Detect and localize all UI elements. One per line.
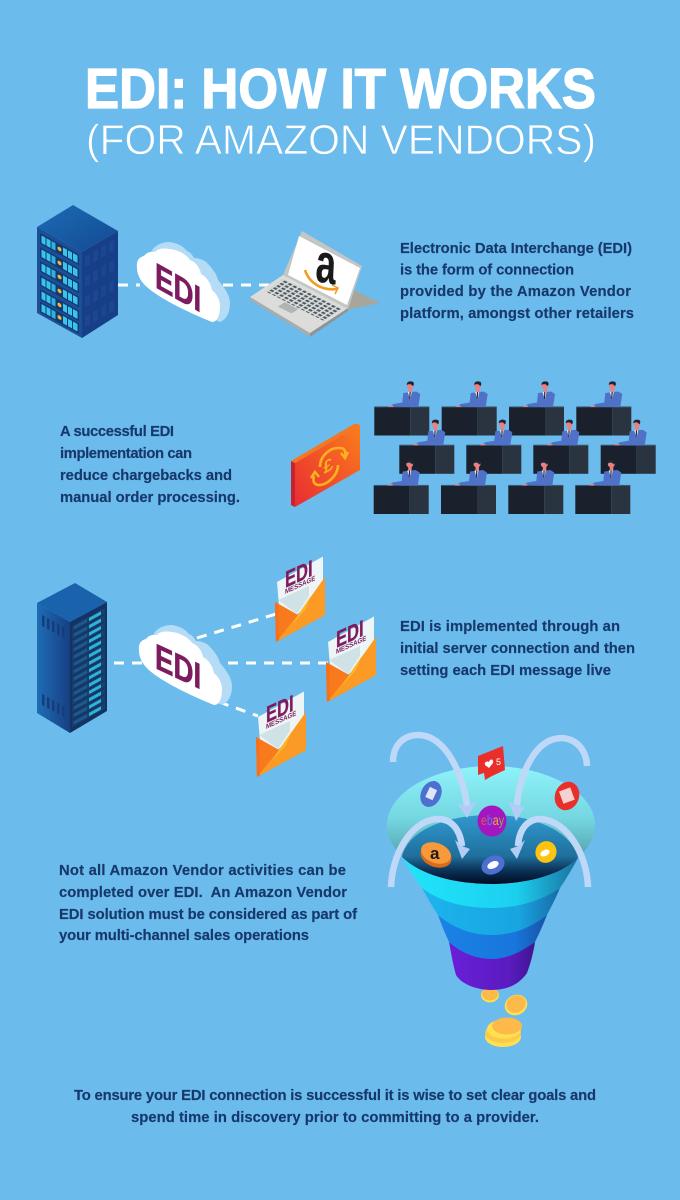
text: closing advice: To ensure your EDI connection is successful it is wise to set clear goals and [74,1088,596,1104]
icon: like notification badge [478,746,505,780]
icon: eBay badge [478,806,506,836]
text: multi-channel note: Not all Amazon Vendor activities can be [59,863,346,879]
text: EDI definition: is the form of connection [400,262,574,278]
icon: newspaper badge blue [416,778,446,810]
icon: EDI cloud: EDI [155,255,201,321]
illustration: sales funnel [387,735,595,1047]
icon: EDI message envelope bottom: MESSAGE [266,710,296,731]
icon: laptop with Amazon logo: a [314,231,338,298]
illustration: office workers at desks [374,381,656,514]
icon: EDI message envelope top: MESSAGE [285,575,315,596]
text: multi-channel note: EDI solution must be considered as part of [59,907,357,923]
funnel interior [402,815,578,884]
icon: Amazon badge: a [430,844,440,863]
panel: EDI connection diagram [37,205,380,338]
text: EDI definition: Electronic Data Interchange (EDI) [400,241,632,257]
text: multi-channel note: your multi-channel sales operations [59,928,309,944]
icon: EDI message envelope bottom [256,690,306,777]
icon: EDI message envelope top [275,555,325,642]
text: multi-channel note [59,863,357,944]
arrow: lower left into funnel [391,819,470,887]
arrow: lower right into funnel [510,819,588,887]
icon: laptop with Amazon logo [250,231,380,337]
text: implementation steps: initial server connection and then [400,641,635,657]
icon: store badge red [551,778,583,814]
connection dashes [118,284,272,286]
subtitle: (FOR AMAZON VENDORS) [86,116,596,163]
icon: EDI cloud [137,242,230,322]
text: successful implementation [60,424,240,506]
text: implementation steps: setting each EDI message live [400,663,611,679]
arrow: top left into funnel [393,735,477,818]
text: successful implementation: A successful EDI [60,424,174,440]
text: successful implementation: reduce chargebacks and [60,468,232,484]
text: implementation steps [400,619,635,679]
icon: server rack [37,205,118,338]
panel: EDI messages diagram [37,555,376,777]
text: successful implementation: manual order processing. [60,490,240,506]
icon: Amazon badge [417,838,455,872]
text: EDI definition: platform, amongst other retailers [400,306,634,322]
icon: EDI cloud [139,625,232,705]
funnel layers [449,942,535,990]
icon: EDI message envelope top: EDI [285,555,313,594]
icon: image badge blue [478,852,508,878]
arrow: top right into funnel [509,738,587,821]
icon: like notification badge: 5 [496,757,501,767]
icon: tag badge yellow [532,838,560,866]
title: EDI: HOW IT WORKS [85,57,596,120]
text: multi-channel note: completed over EDI. An Amazon Vendor [59,885,347,901]
icon: EDI message envelope middle [326,615,376,702]
icon: EDI message envelope middle: MESSAGE [336,635,366,656]
text: EDI definition: provided by the Amazon Vendor [400,284,631,300]
connection dashes [114,614,328,716]
icon: EDI message envelope middle: EDI [336,615,364,654]
text: successful implementation: implementation can [60,446,192,462]
icon: pound exchange card [291,424,360,507]
icon: eBay badge: ebay [481,812,504,828]
icon: EDI cloud: EDI [155,637,201,698]
icon: server tower [37,583,107,733]
coins falling [481,988,531,1047]
text: EDI definition [400,241,634,322]
funnel rim [387,766,595,884]
icon: EDI message envelope bottom: EDI [266,690,294,729]
text: closing advice [74,1088,596,1126]
text: implementation steps: EDI is implemented through an [400,619,620,635]
text: closing advice: spend time in discovery prior to committing to a provider. [131,1110,539,1126]
icon: pound exchange card: £ [322,453,334,478]
